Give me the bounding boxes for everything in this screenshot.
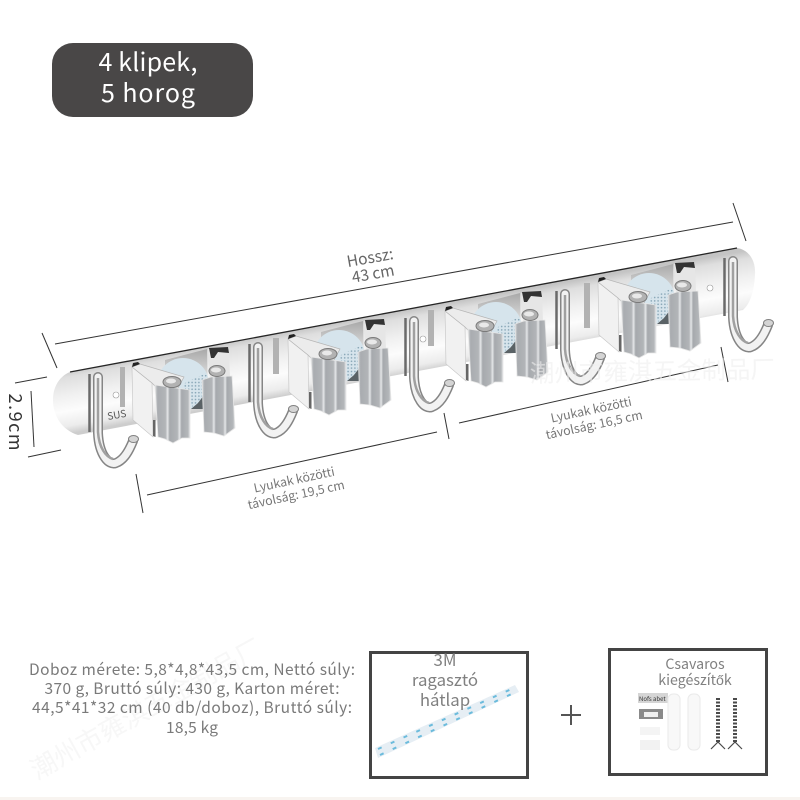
product: wall rail with clips and hooks — [53, 248, 774, 463]
hook 1 — [90, 374, 138, 463]
plus sign — [561, 705, 581, 725]
clip 1 — [132, 347, 235, 443]
bottom strip — [0, 797, 800, 800]
mounting holes — [113, 285, 713, 398]
panel label: Csavaros — [665, 654, 725, 674]
dimension: rail height: 2.9cm — [3, 394, 29, 450]
panel label — [412, 647, 478, 711]
hook 3 — [406, 318, 454, 407]
panel label: ragasztó — [412, 667, 478, 691]
wall plugs — [668, 694, 700, 750]
dimension: hole spacing 16.5 cm: Lyukak közötti — [549, 392, 633, 426]
dimension: rail height — [3, 377, 61, 457]
panel label: hátlap — [420, 687, 470, 711]
hook 4 — [556, 291, 606, 380]
watermark: 潮州市雍淇五金制品厂 — [530, 351, 775, 390]
packaging specs text: 44,5*41*32 cm (40 db/doboz), Bruttó súly: — [32, 696, 352, 718]
packaging specs text: 18,5 kg — [166, 716, 218, 738]
hook 2 — [250, 344, 298, 433]
panel label: 3M — [434, 647, 456, 671]
badge: 4 clips, 5 hooks — [52, 43, 253, 117]
dimension: total length: 43 cm — [350, 259, 396, 288]
dimension: hole spacing 16.5 cm — [459, 347, 728, 443]
clip 3 — [445, 291, 548, 387]
packaging specs text: Doboz mérete: 5,8*4,8*43,5 cm, Nettó súly: — [29, 658, 355, 680]
panel label: kiegészítők — [658, 670, 732, 690]
adhesive strip — [375, 685, 519, 758]
clip 2 — [288, 319, 391, 415]
caps: Nofs abet — [639, 694, 666, 703]
rail stamp: SUS — [106, 405, 127, 423]
dimension: total length — [42, 203, 746, 368]
rail slots — [120, 283, 590, 407]
rail top edge — [70, 248, 737, 372]
dimension: hole spacing 19.5 cm: távolság: 19,5 cm — [246, 475, 346, 513]
caps — [638, 693, 668, 750]
screws — [711, 698, 742, 749]
clip 4 — [598, 262, 701, 358]
rail — [53, 248, 755, 435]
packaging specs text: 370 g, Bruttó súly: 430 g, Karton méret: — [44, 677, 340, 699]
dimension: total length: Hossz: — [345, 242, 395, 272]
dimension: hole spacing 19.5 cm: Lyukak közötti — [252, 462, 336, 496]
badge: 4 clips, 5 hooks: 5 horog — [101, 74, 195, 110]
panel: screw accessories — [610, 650, 766, 774]
faint watermark lower left: 潮州市雍淇五金制品厂 — [23, 629, 268, 787]
packaging specs text — [29, 658, 355, 738]
dimension: hole spacing 16.5 cm: távolság: 16,5 cm — [544, 405, 644, 443]
dimension: hole spacing 19.5 cm — [136, 413, 449, 513]
panel: 3M adhesive backing — [370, 647, 528, 778]
hook 5 — [724, 258, 774, 347]
panel label — [658, 654, 732, 690]
badge: 4 clips, 5 hooks: 4 klipek, — [98, 43, 198, 79]
